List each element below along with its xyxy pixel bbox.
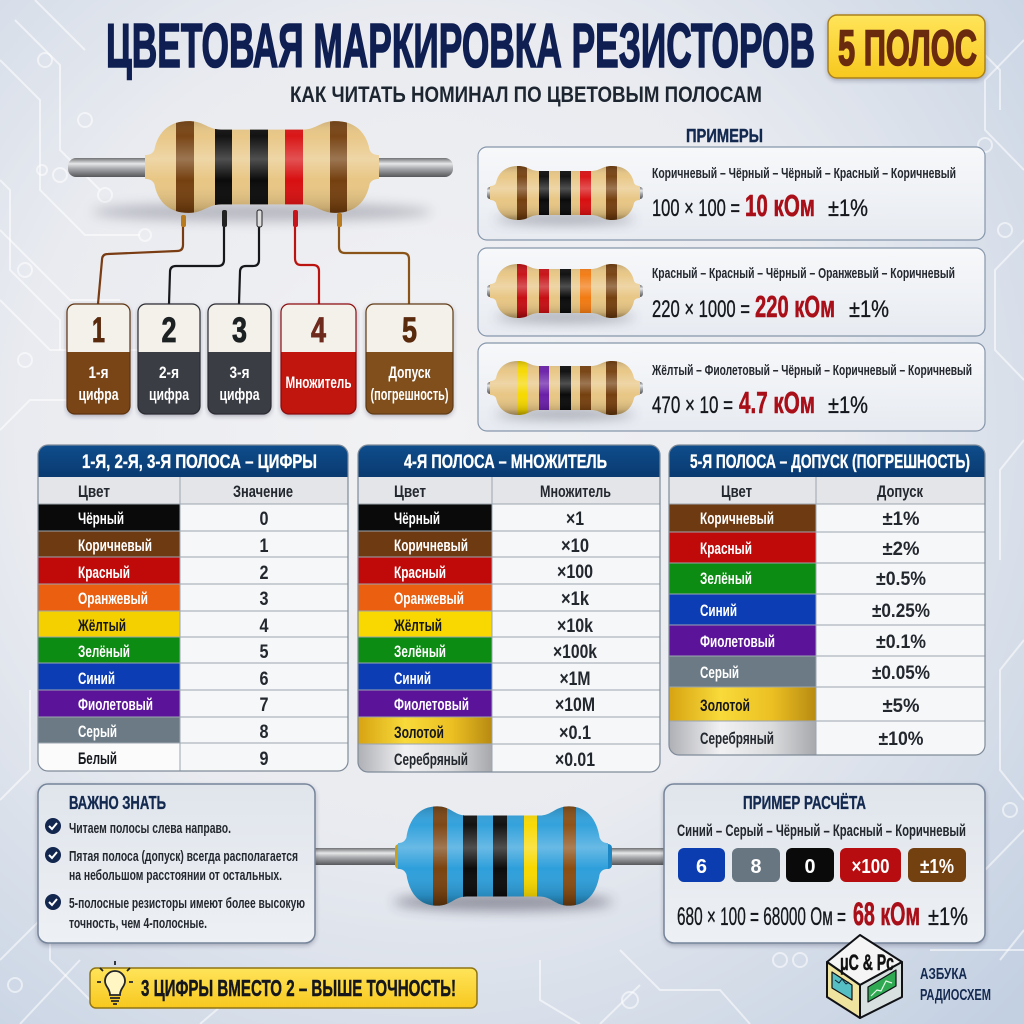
multiplier values: ×0.01	[555, 750, 595, 771]
colour names: Синий	[78, 670, 115, 688]
logo text: РАДИОСХЕМ	[920, 987, 991, 1004]
logo: cube: μC & Pc	[840, 950, 894, 975]
colour names	[393, 510, 469, 769]
logo text: АЗБУКА	[920, 966, 967, 983]
icon: check 1	[45, 818, 61, 834]
formula: 68 кОм	[853, 896, 920, 932]
tolerance values: ±0.1%	[876, 632, 926, 653]
column headers: Множитель	[540, 483, 611, 501]
digit values: 1	[260, 536, 269, 557]
multiplier values: ×1	[566, 509, 584, 530]
panel: example 2	[478, 248, 985, 336]
column headers: Цвет	[394, 483, 426, 501]
colour names: Фиолетовый	[700, 633, 775, 651]
colour names: Красный	[394, 564, 446, 582]
tolerance values: ±0.05%	[872, 663, 930, 684]
colour names: Коричневый	[78, 537, 152, 555]
tolerance values: ±5%	[882, 696, 920, 717]
colour names: Оранжевый	[78, 590, 148, 608]
panel: example 1: ±1%	[828, 195, 868, 222]
label 2: 2	[162, 311, 176, 350]
heading: ПРИМЕР РАСЧЁТА	[743, 792, 866, 813]
colour names: Жёлтый	[77, 617, 126, 635]
point 1: Читаем полосы слева направо.	[69, 821, 231, 837]
table: multiplier	[358, 445, 660, 772]
main resistor	[68, 115, 453, 221]
icon: check 2	[45, 847, 61, 863]
tolerance values: ±2%	[882, 539, 920, 560]
panel: example 1: 100 × 100 =	[652, 195, 740, 222]
panel: example 3: 470 × 10 =	[652, 392, 733, 419]
colour names: Чёрный	[394, 510, 440, 528]
digit values: 7	[260, 695, 268, 716]
multiplier values: ×10k	[557, 616, 593, 637]
heading: примеры: ПРИМЕРЫ	[686, 126, 763, 146]
colour names: Фиолетовый	[78, 696, 153, 714]
label 5: 5	[402, 311, 417, 350]
colour names: Белый	[78, 750, 117, 768]
chip 0: 0	[804, 856, 816, 878]
panel: example 3: ±1%	[828, 392, 868, 419]
blue resistor	[315, 800, 664, 911]
table header: 1-Я, 2-Я, 3-Я ПОЛОСА – ЦИФРЫ	[82, 452, 317, 473]
column headers	[721, 483, 924, 501]
label 3	[208, 304, 271, 414]
panel: example 2: 220 × 1000 =	[652, 296, 750, 323]
colour names: Красный	[78, 564, 130, 582]
colour names: Оранжевый	[394, 590, 464, 608]
colour names: Зелёный	[700, 570, 752, 588]
chip 0	[786, 848, 834, 882]
panel: example 1: 10 кОм	[745, 188, 815, 223]
icon: resistor 3	[487, 358, 643, 419]
colour names: Синий	[700, 602, 737, 620]
colour names: Золотой	[394, 724, 444, 742]
label 5: Допуск	[388, 363, 431, 382]
label 4	[281, 304, 356, 414]
label 1	[67, 304, 130, 414]
tolerance values: ±0.5%	[876, 569, 926, 590]
logo: cube	[827, 935, 902, 1018]
colour names: Зелёный	[78, 643, 130, 661]
multiplier values	[553, 509, 597, 771]
chip x100	[840, 848, 901, 882]
formula: 680 × 100 = 68000 Ом =	[677, 903, 846, 931]
label 3: цифра	[220, 385, 260, 404]
panel: example 2: 220 кОм	[755, 289, 835, 324]
tolerance values: ±0.25%	[872, 601, 930, 622]
label 2	[138, 304, 200, 414]
point 3: точность, чем 4-полосные.	[69, 916, 207, 932]
multiplier values: ×1k	[561, 589, 589, 610]
colour names: Коричневый	[700, 510, 774, 528]
panel: example 1	[478, 147, 985, 240]
badge: 5 полос	[828, 15, 985, 78]
tolerance values	[872, 509, 930, 750]
table: tolerance	[669, 445, 985, 755]
digit values: 5	[260, 642, 269, 663]
chip 6	[678, 848, 725, 882]
multiplier values: ×10M	[555, 695, 595, 716]
panel: example 2: ±1%	[849, 296, 889, 323]
icon: light bulb	[97, 961, 133, 1004]
digit values: 6	[260, 669, 268, 690]
multiplier values: ×100k	[553, 642, 597, 663]
column headers	[394, 483, 611, 501]
chip tolerance	[908, 848, 966, 882]
chip 8	[732, 848, 780, 882]
label 3: 3	[232, 311, 247, 350]
column headers: Значение	[233, 483, 293, 501]
multiplier values: ×0.1	[559, 723, 591, 744]
colour names	[77, 510, 153, 768]
colour names: Красный	[700, 540, 752, 558]
chip x100: ×100	[852, 856, 890, 878]
panel: example 3	[478, 343, 985, 431]
tolerance values: ±1%	[882, 509, 920, 530]
colour names: Золотой	[700, 697, 750, 715]
logo text	[920, 966, 991, 1004]
chip tolerance: ±1%	[920, 856, 954, 878]
label 5	[366, 304, 453, 414]
label 1: цифра	[78, 385, 119, 404]
label 3: 3-я	[230, 363, 250, 382]
label 4: 4	[311, 311, 326, 350]
digit values	[260, 509, 269, 770]
point 2: на небольшом расстоянии от остальных.	[69, 868, 282, 884]
icon: check 3	[45, 894, 61, 910]
table: digits	[38, 445, 348, 771]
colour names: Серый	[700, 664, 739, 682]
label 1: 1-я	[88, 363, 108, 382]
icon: resistor 2	[487, 261, 643, 322]
panel: пример расчёта	[664, 784, 985, 943]
heading: ВАЖНО ЗНАТЬ	[69, 792, 166, 813]
label 1: 1	[92, 311, 105, 350]
icon: resistor 1	[487, 163, 643, 224]
connector wires	[98, 210, 409, 304]
column headers: Допуск	[877, 483, 924, 501]
colour names: Синий	[394, 670, 431, 688]
multiplier values: ×10	[561, 536, 589, 557]
chip 8: 8	[750, 856, 762, 878]
colour names: Чёрный	[78, 510, 124, 528]
column headers: Цвет	[78, 483, 110, 501]
point 2	[69, 849, 298, 884]
digit values: 4	[260, 616, 269, 637]
colour names: Фиолетовый	[394, 696, 469, 714]
point 3: 5-полосные резисторы имеют более высокую	[69, 896, 305, 912]
label 5: (погрешность)	[370, 385, 448, 404]
callout: yellow bar	[90, 961, 477, 1008]
colour names: Зелёный	[394, 643, 446, 661]
colour names: Коричневый	[394, 537, 468, 555]
label 2: 2-я	[159, 363, 179, 382]
label 2: цифра	[149, 385, 189, 404]
panel: важно знать	[38, 784, 315, 943]
digit values: 3	[260, 589, 268, 610]
colour names	[700, 510, 775, 748]
colour names: Жёлтый	[393, 617, 442, 635]
chip 6: 6	[696, 856, 707, 878]
multiplier values: ×100	[557, 562, 593, 583]
point 2: Пятая полоса (допуск) всегда располагается	[69, 849, 298, 865]
digit values: 9	[260, 749, 268, 770]
column headers: Цвет	[721, 483, 752, 501]
digit values: 0	[260, 509, 268, 530]
colour names: Серый	[78, 723, 117, 741]
label 4: Множитель	[286, 373, 352, 392]
digit values: 8	[260, 722, 268, 743]
colour names: Серебряный	[394, 751, 468, 769]
formula: ±1%	[928, 903, 968, 931]
column headers	[78, 483, 293, 501]
digit values: 2	[260, 563, 268, 584]
table header: 4-Я ПОЛОСА – МНОЖИТЕЛЬ	[404, 452, 607, 473]
point 3	[69, 896, 305, 932]
colour names: Серебряный	[700, 730, 774, 748]
subtitle: КАК ЧИТАТЬ НОМИНАЛ ПО ЦВЕТОВЫМ ПОЛОСАМ	[290, 82, 762, 107]
panel: example 3: 4.7 кОм	[739, 385, 815, 420]
tolerance values: ±10%	[878, 729, 924, 750]
multiplier values: ×1M	[560, 669, 590, 690]
callout: yellow bar: 3 ЦИФРЫ ВМЕСТО 2 – ВЫШЕ ТОЧНОСТЬ!	[141, 975, 456, 1001]
